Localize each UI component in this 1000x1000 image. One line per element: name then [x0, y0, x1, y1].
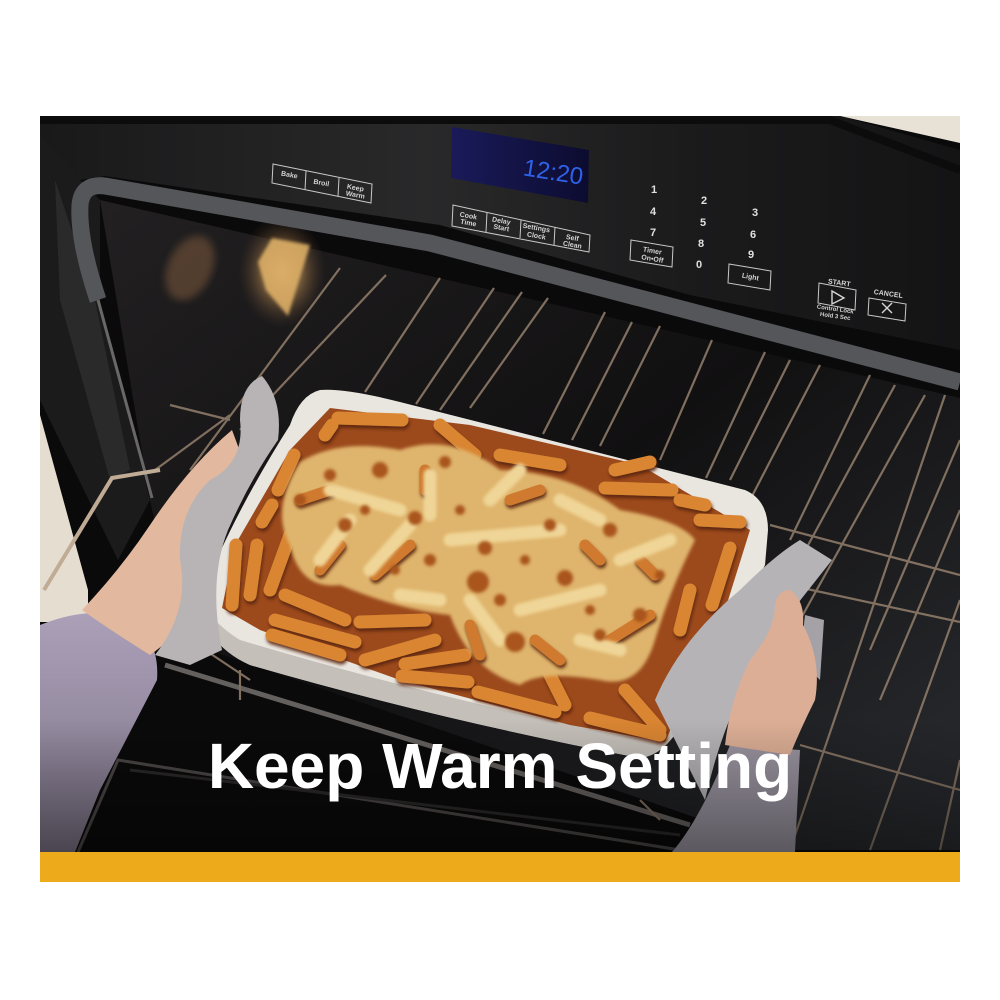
title: Keep Warm Setting — [208, 730, 792, 802]
panel labels: START — [827, 278, 852, 289]
panel labels: Timer — [642, 246, 662, 257]
kitchen wall at left — [40, 415, 88, 622]
panel labels: Time — [460, 219, 477, 228]
left hand with towel — [82, 376, 279, 665]
panel labels: Start — [493, 224, 510, 233]
keypad digits: 9 — [748, 249, 754, 261]
panel labels: Cook — [459, 212, 478, 222]
oven body background — [40, 116, 960, 852]
panel labels: Clock — [526, 231, 546, 242]
panel labels: Self — [565, 234, 580, 243]
panel labels: Bake — [280, 171, 298, 180]
panel labels: Clean — [562, 240, 582, 251]
door gasket — [80, 186, 960, 382]
left sleeve — [40, 613, 157, 852]
keypad digits: 8 — [698, 238, 704, 250]
panel labels: Light — [741, 273, 760, 283]
panel labels — [280, 171, 904, 322]
baked pasta — [222, 408, 750, 742]
start and cancel icons — [832, 291, 892, 313]
clock display — [451, 127, 589, 203]
keypad digits — [650, 184, 758, 271]
panel labels: Hold 3 Sec — [820, 312, 851, 322]
oven interior — [100, 200, 960, 850]
keypad digits: 6 — [750, 229, 756, 241]
browned spots — [294, 456, 665, 652]
keypad digits: 0 — [696, 259, 702, 271]
photo: casserole being placed in oven — [40, 116, 960, 852]
right hand with towel — [655, 540, 832, 800]
panel labels: Warm — [345, 190, 365, 201]
casserole dish — [200, 390, 768, 758]
cheese highlights — [320, 470, 670, 650]
panel buttons — [272, 164, 906, 321]
keypad digits: 1 — [651, 184, 657, 196]
interior light glare — [156, 216, 326, 328]
keypad digits: 2 — [701, 195, 707, 207]
tubes poking through cheese — [300, 470, 655, 660]
panel labels: On•Off — [641, 254, 664, 265]
panel labels: CANCEL — [873, 289, 904, 300]
melted cheese — [282, 444, 695, 685]
keypad digits: 7 — [650, 227, 656, 239]
panel labels: Keep — [346, 184, 364, 193]
panel labels: Broil — [313, 179, 330, 188]
panel labels: Settings — [522, 223, 551, 234]
keypad digits: 5 — [700, 217, 706, 229]
panel labels: Control Lock — [816, 304, 855, 316]
keypad digits: 3 — [752, 207, 758, 219]
penne tubes — [232, 418, 740, 735]
control panel — [40, 116, 960, 350]
lower door window — [78, 760, 680, 852]
panel labels: Delay — [491, 216, 511, 227]
oven rack wires — [155, 268, 960, 850]
bottom shading — [40, 720, 960, 852]
right sleeve — [672, 745, 800, 852]
keypad digits: 4 — [650, 206, 657, 218]
yellow accent bar — [40, 852, 960, 882]
wall at top right — [840, 116, 960, 143]
clock display: 12:20 — [521, 155, 585, 191]
oven side frame — [40, 130, 160, 590]
